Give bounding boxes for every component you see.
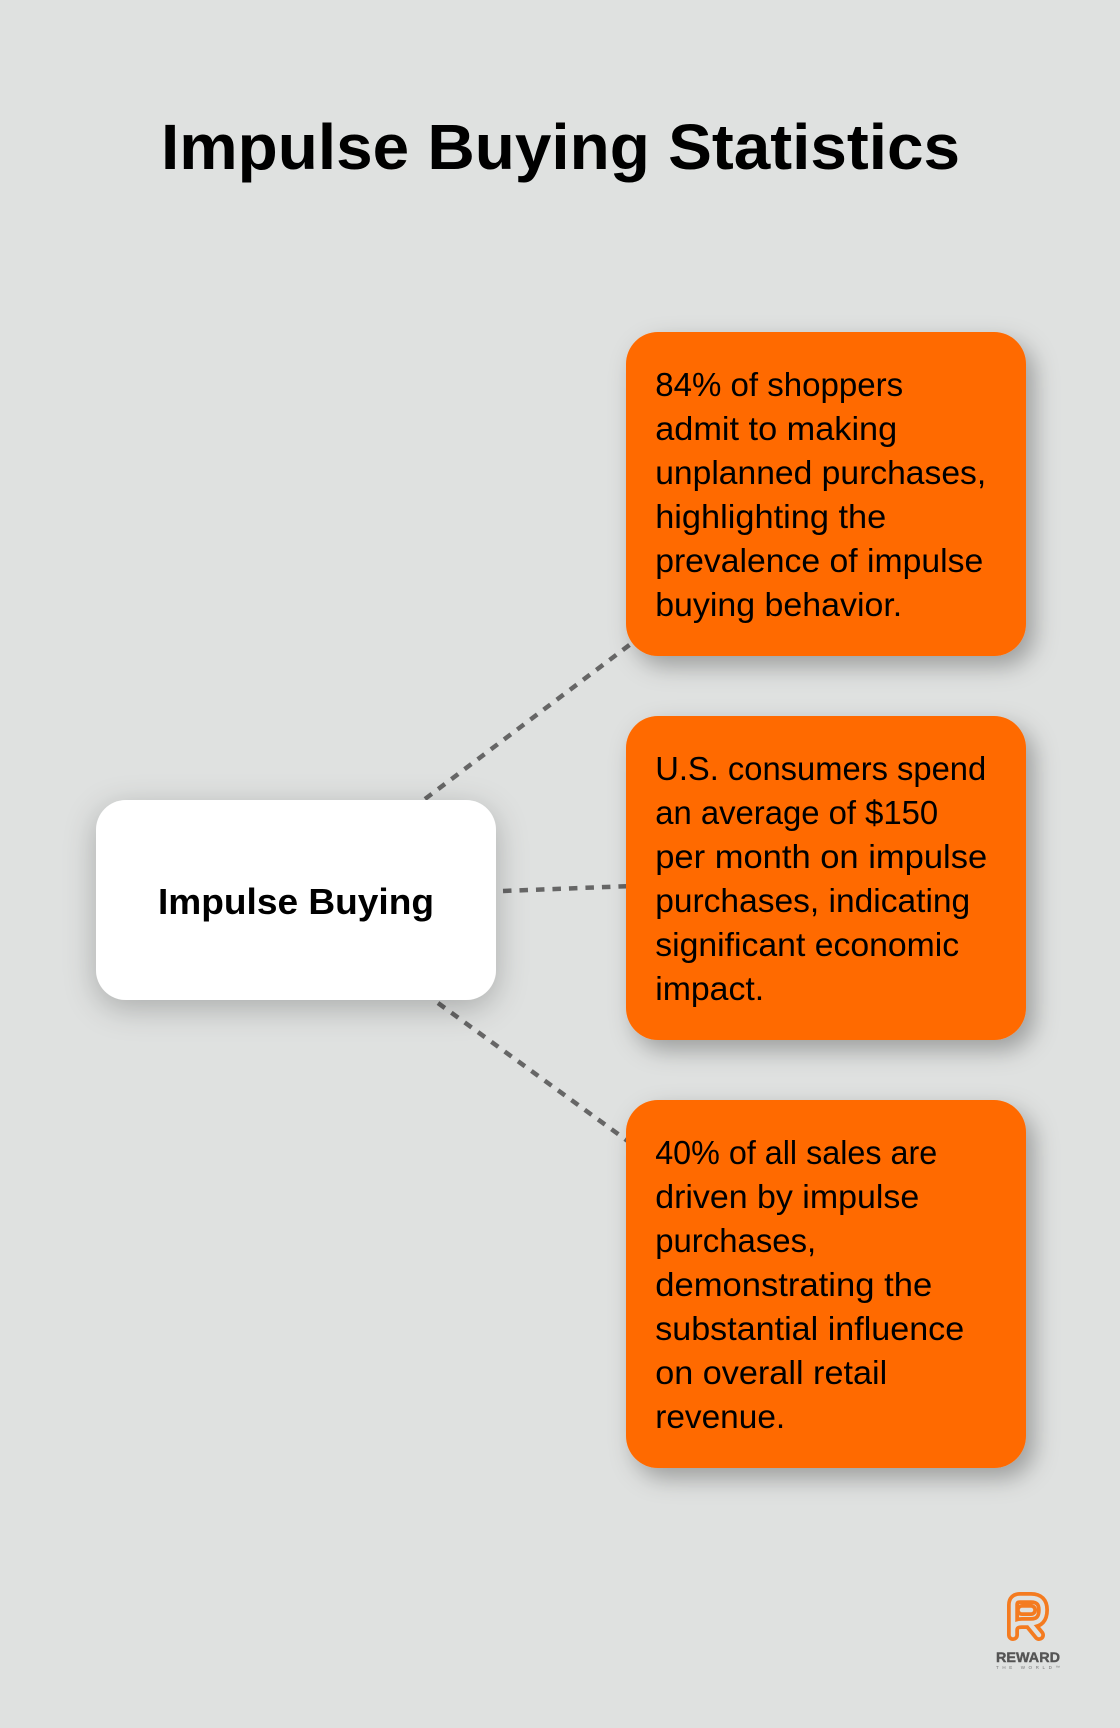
panel: 84% of shoppers card: buying behavior. — [655, 586, 902, 623]
icon: orange R mark — [1013, 1598, 1043, 1635]
panel: 84% of shoppers card: prevalence of impulse — [655, 542, 983, 579]
panel: 40% of all sales card: on overall retail — [655, 1354, 887, 1391]
panel: center node Impulse Buying: Impulse Buying — [158, 881, 434, 922]
panel: 40% of all sales card: driven by impulse — [655, 1178, 919, 1215]
panel: $150 per month card: significant economic — [655, 926, 959, 963]
panel: $150 per month card: purchases, indicating — [655, 882, 970, 919]
connector: center to top card — [425, 637, 640, 799]
panel: 84% of shoppers card: highlighting the — [655, 498, 886, 535]
connector: center to bottom card — [438, 1003, 640, 1150]
logo tagline: THE WORLD™ — [996, 1665, 1060, 1670]
panel: 40% of all sales card — [626, 1100, 1026, 1468]
panel: $150 per month card: impact. — [655, 970, 764, 1007]
panel: $150 per month card: per month on impulse — [655, 838, 987, 875]
panel: 40% of all sales card: demonstrating the — [655, 1266, 932, 1303]
panel: 84% of shoppers card: unplanned purchases, — [655, 454, 986, 491]
panel: 84% of shoppers card — [626, 332, 1026, 656]
panel: $150 per month card — [626, 716, 1026, 1040]
panel: center node Impulse Buying — [96, 800, 496, 1000]
panel: 40% of all sales card: 40% of all sales are — [655, 1134, 937, 1171]
panel: 40% of all sales card: substantial influence — [655, 1310, 964, 1347]
panel: 84% of shoppers card: admit to making — [655, 410, 897, 447]
panel: 40% of all sales card: revenue. — [655, 1398, 785, 1435]
logo: Reward the World — [996, 1598, 1060, 1670]
panel: 84% of shoppers card: 84% of shoppers — [655, 366, 903, 403]
panel: $150 per month card: an average of $150 — [655, 794, 938, 831]
title: Impulse Buying Statistics — [161, 111, 960, 183]
panel: 40% of all sales card: purchases, — [655, 1222, 816, 1259]
connector: center to middle card — [503, 886, 632, 891]
panel: $150 per month card: U.S. consumers spend — [655, 750, 986, 787]
logo wordmark: REWARD — [996, 1649, 1060, 1665]
